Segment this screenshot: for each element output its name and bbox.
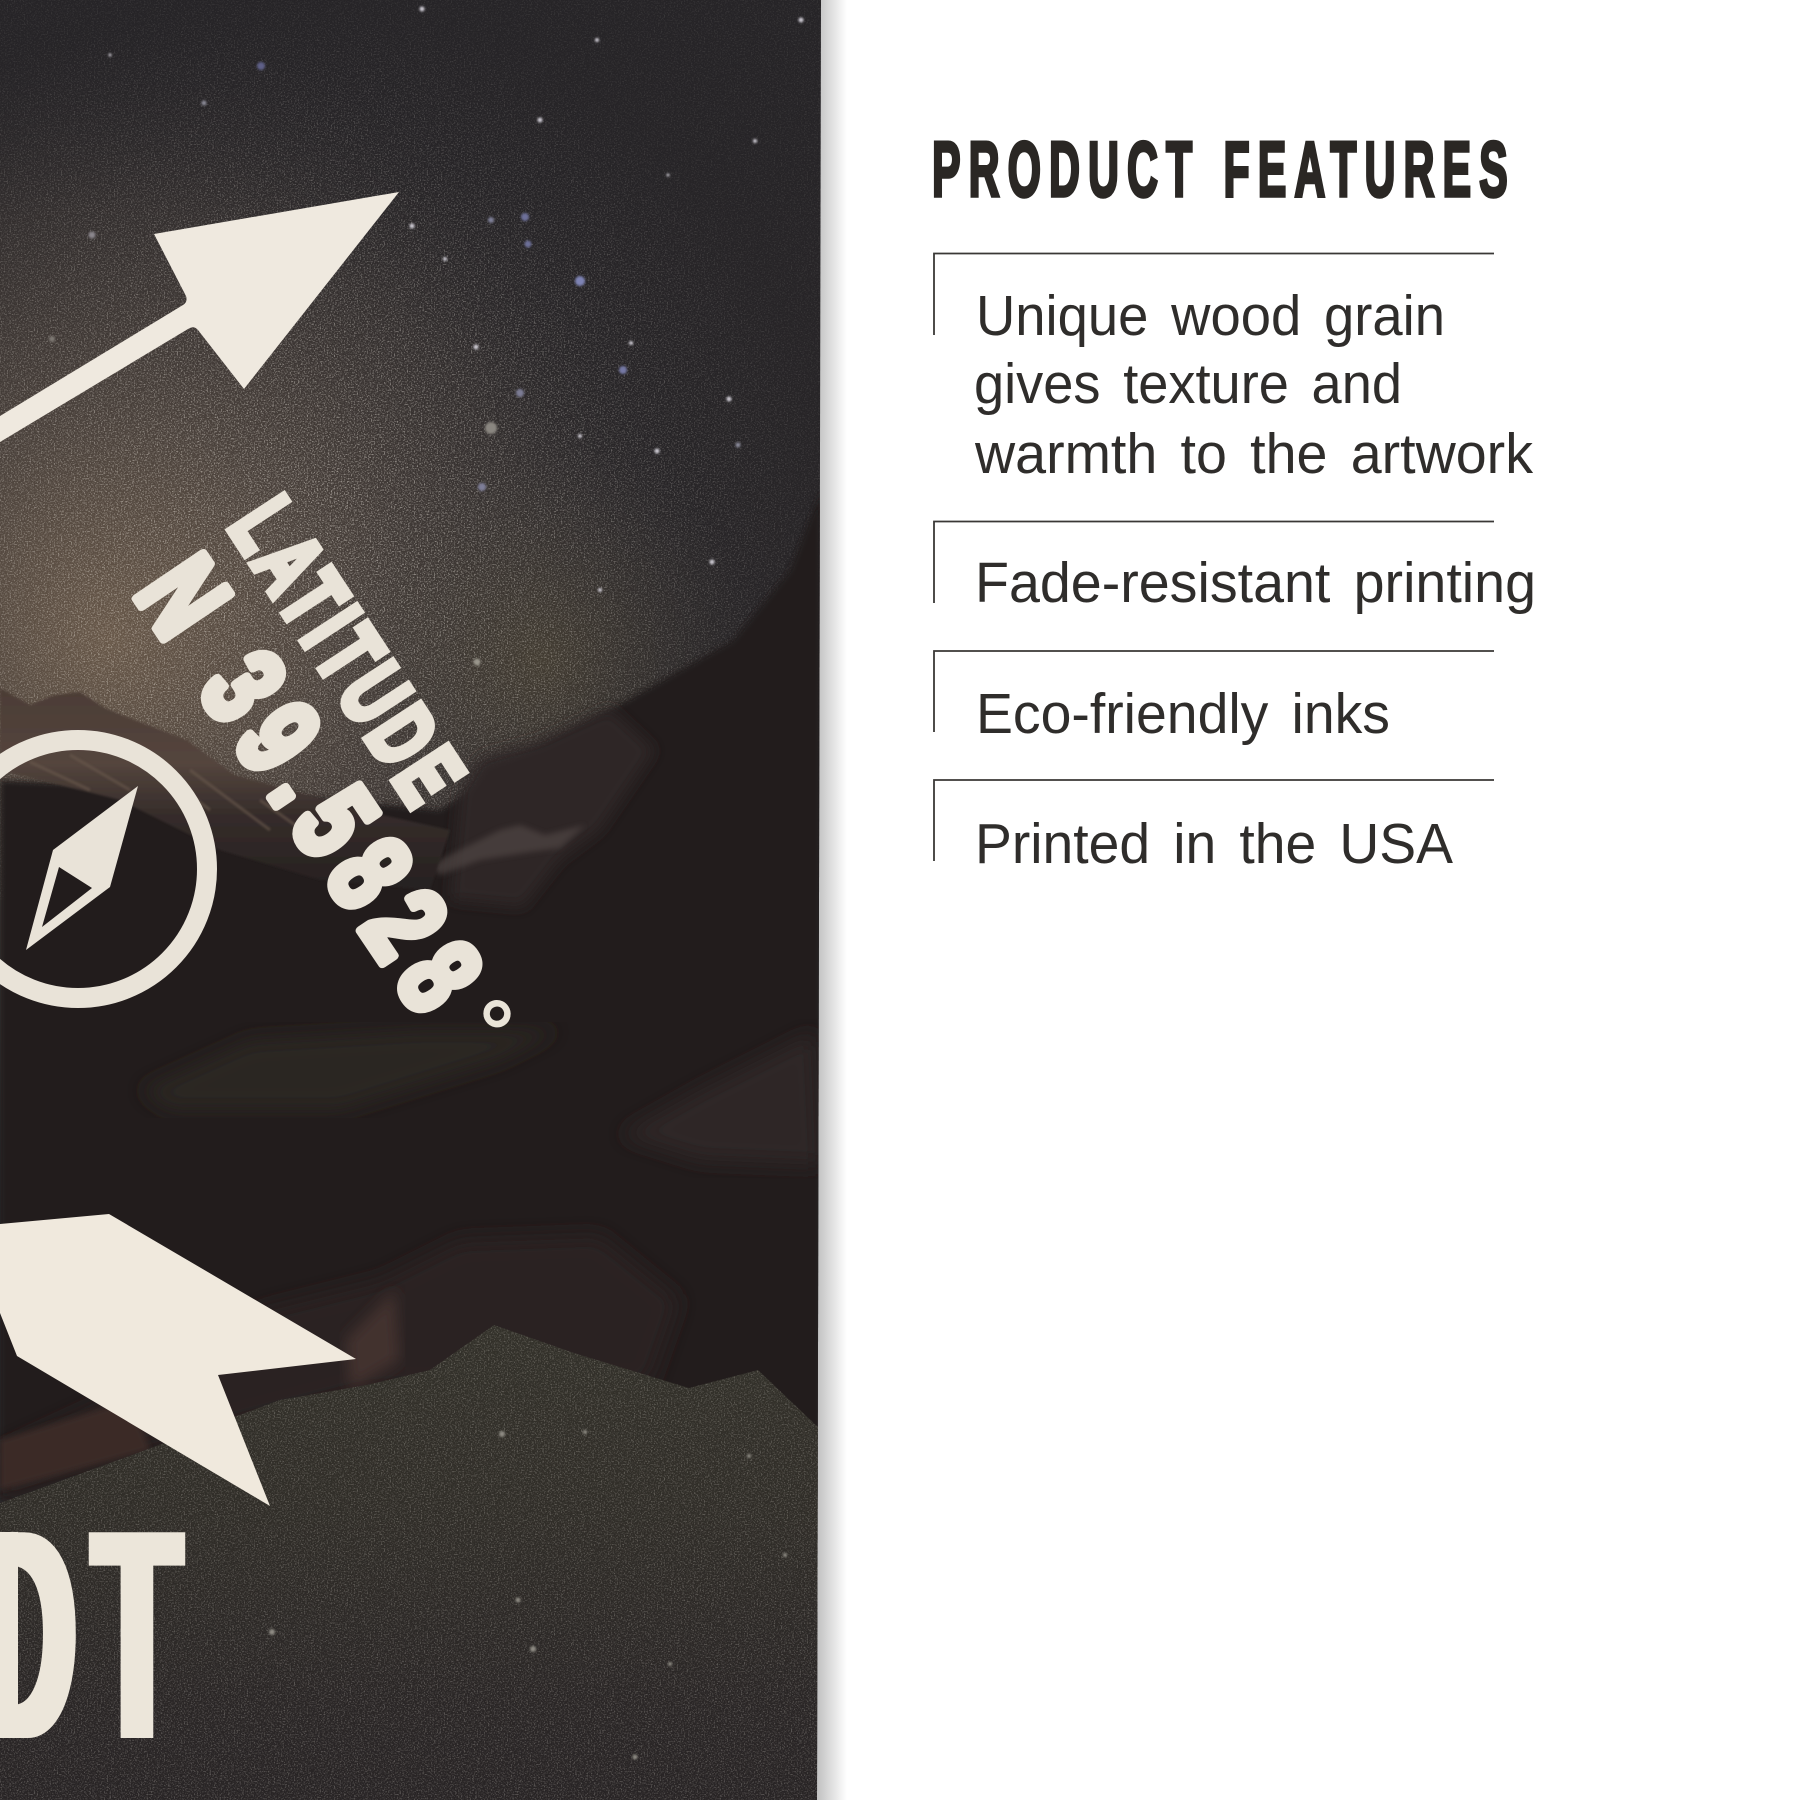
panel: night sky artwork on wood <box>0 0 821 1800</box>
icon: lower arrow fletching <box>0 1214 356 1506</box>
distant ridge, left <box>0 688 450 890</box>
olive glow near horizon <box>500 570 658 732</box>
compass needle <box>26 786 138 950</box>
feature: printed in USA: Printed in the USA <box>975 812 1453 876</box>
panel: product features <box>932 127 1536 876</box>
icon: compass <box>0 740 207 998</box>
ground grain <box>0 1300 821 1800</box>
ground stars <box>269 1430 787 1760</box>
feature: wood grain: gives texture and <box>974 352 1402 416</box>
feature: eco-friendly <box>934 651 1494 746</box>
feature: fade-resistant <box>934 522 1536 615</box>
ridge streaks <box>30 755 295 831</box>
stars <box>49 6 804 666</box>
sky grain <box>0 0 821 900</box>
compass ring <box>0 740 207 998</box>
icon: upper arrow <box>0 192 399 442</box>
milky way glow <box>0 172 540 959</box>
reflected rocks <box>147 1249 662 1434</box>
lakeshore haze <box>160 1036 517 1104</box>
lit mountain on the right <box>642 1044 819 1160</box>
text: degree sign: ° <box>432 981 534 1066</box>
feature: fade-resistant: Fade-resistant printing <box>975 551 1536 615</box>
foreground ground <box>0 1325 821 1800</box>
panel edge shadow <box>815 0 847 1800</box>
pale rock streak <box>430 825 585 875</box>
reddish rock strip, left <box>0 1400 150 1490</box>
feature: wood grain: Unique wood grain <box>976 284 1445 348</box>
text: latitude value: N 39.5828 <box>112 535 515 1045</box>
heading: PRODUCT FEATURES <box>932 127 1516 213</box>
middle mountain <box>450 708 655 907</box>
feature: wood grain <box>934 254 1533 486</box>
feature: wood grain: warmth to the artwork <box>974 422 1533 486</box>
sky background <box>0 0 821 1800</box>
feature: printed in USA <box>934 780 1494 876</box>
darkest lake and mountain base <box>0 490 821 1500</box>
text: LATITUDE: LATITUDE <box>210 480 487 827</box>
feature: eco-friendly: Eco-friendly inks <box>976 682 1390 746</box>
reddish streaks under arrow <box>345 1290 400 1390</box>
